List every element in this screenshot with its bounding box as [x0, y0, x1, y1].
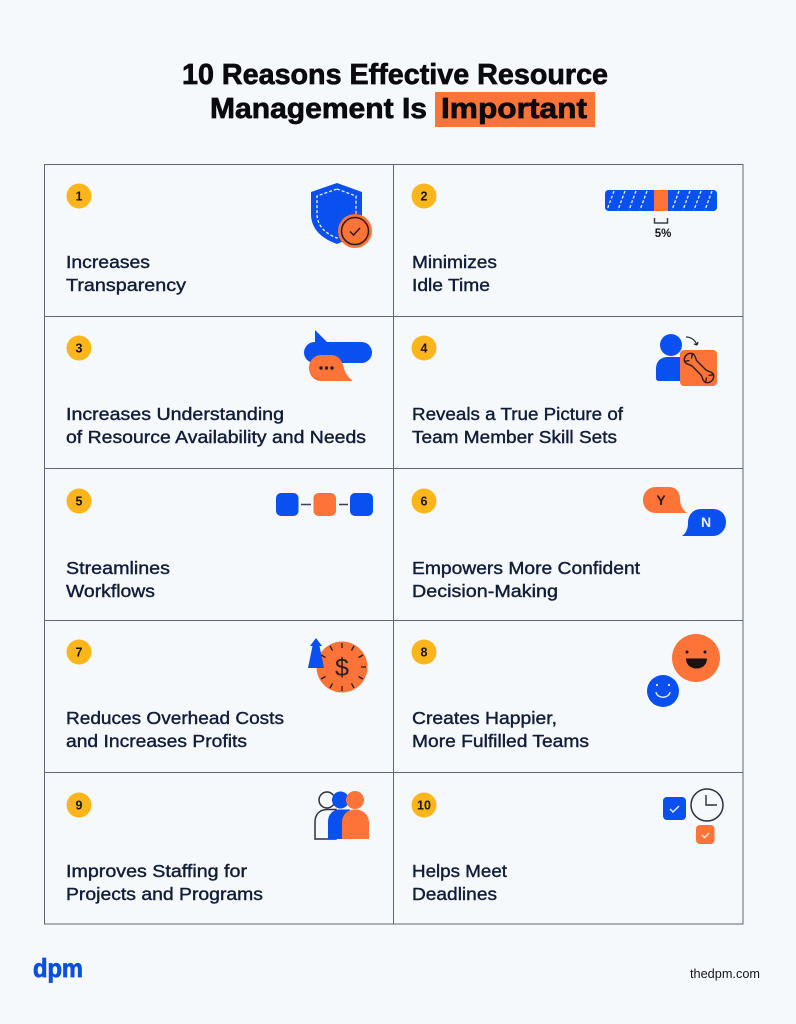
- panel: reason 9: 9: [76, 798, 83, 812]
- panel: reason 10: Helps Meet: [412, 861, 507, 881]
- panel: reason 8: [412, 634, 720, 751]
- title: [182, 59, 608, 127]
- icon: progress bar with 5 percent: 5%: [655, 228, 671, 240]
- panel: reason 5: 5: [76, 494, 83, 508]
- title: Management Is: [210, 93, 427, 125]
- panel: reason 4: [412, 334, 717, 447]
- panel: reason 10: Deadlines: [412, 884, 497, 904]
- panel: grid of ten reasons: [44, 164, 743, 924]
- panel: reason 7: and Increases Profits: [66, 731, 247, 751]
- panel: reason 3: Increases Understanding: [66, 404, 284, 424]
- panel: reason 7: [66, 638, 368, 751]
- icon: workflow squares: [276, 493, 373, 516]
- panel: reason 10: 10: [417, 798, 431, 812]
- panel: reason 7: Reduces Overhead Costs: [66, 708, 284, 728]
- panel: reason 1: Transparency: [66, 275, 186, 295]
- icon: clock and checkboxes: [663, 789, 723, 844]
- icon: three people: [315, 791, 369, 839]
- panel: reason 6: 6: [421, 494, 428, 508]
- icon: dollar clock with up arrow: $: [335, 654, 349, 682]
- title: Important: [441, 93, 587, 125]
- panel: reason 8: 8: [421, 646, 428, 660]
- panel: reason 2: Minimizes: [412, 252, 497, 272]
- panel: reason 4: 4: [421, 342, 428, 356]
- panel: reason 8: More Fulfilled Teams: [412, 731, 589, 751]
- icon: progress bar with 5 percent: [605, 190, 717, 240]
- panel: reason 6: Decision-Making: [412, 581, 558, 601]
- footer url: thedpm.com: [690, 967, 760, 981]
- panel: reason 10: [412, 789, 723, 904]
- panel: reason 9: Improves Staffing for: [66, 861, 247, 881]
- icon: dollar clock with up arrow: [308, 638, 368, 692]
- panel: reason 5: Workflows: [66, 581, 155, 601]
- panel: reason 3: 3: [76, 342, 83, 356]
- logo: dpm: dpm: [33, 953, 83, 983]
- panel: reason 2: Idle Time: [412, 275, 490, 295]
- panel: reason 6: [412, 487, 726, 601]
- panel: reason 4: Team Member Skill Sets: [412, 427, 617, 447]
- title: 10 Reasons Effective Resource: [182, 59, 608, 91]
- panel: reason 1: Increases: [66, 252, 150, 272]
- panel: reason 7: 7: [76, 646, 83, 660]
- panel: reason 6: Empowers More Confident: [412, 558, 640, 578]
- panel: reason 5: [66, 488, 373, 601]
- icon: chat bubbles: [304, 330, 372, 381]
- panel: reason 9: Projects and Programs: [66, 884, 263, 904]
- icon: yes and no bubbles: Y: [656, 492, 666, 508]
- panel: reason 1: [66, 183, 372, 295]
- panel: reason 3: [66, 330, 372, 447]
- icon: yes and no bubbles: N: [701, 514, 711, 530]
- panel: reason 4: Reveals a True Picture of: [412, 404, 623, 424]
- panel: reason 5: Streamlines: [66, 558, 170, 578]
- panel: reason 1: 1: [76, 190, 83, 204]
- icon: person with wrench: [656, 334, 717, 386]
- panel: reason 9: [66, 791, 369, 904]
- panel: reason 2: 2: [421, 190, 428, 204]
- panel: reason 2: [412, 184, 717, 295]
- panel: reason 8: Creates Happier,: [412, 708, 557, 728]
- panel: reason 3: of Resource Availability and Needs: [66, 427, 366, 447]
- icon: smiling faces: [647, 634, 720, 707]
- icon: shield with check: [311, 183, 372, 248]
- icon: yes and no bubbles: [643, 487, 726, 536]
